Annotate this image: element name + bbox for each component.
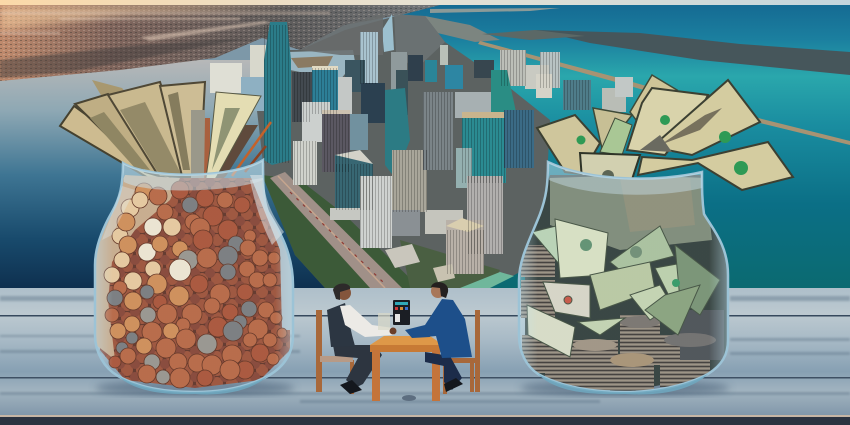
wooden table top bbox=[0, 288, 850, 425]
far left land bbox=[0, 5, 440, 81]
left bills fan bbox=[60, 80, 271, 198]
right jar contents: coin stacks and bills bbox=[521, 175, 728, 392]
tall teal tower bbox=[264, 22, 291, 165]
right businessman bbox=[405, 282, 472, 392]
left jar contents: coins bbox=[90, 175, 293, 388]
left bay water bbox=[0, 60, 400, 290]
jar shadows bbox=[95, 380, 730, 396]
left jar glass bbox=[95, 160, 293, 394]
right bills fan bbox=[537, 75, 793, 210]
left chair bbox=[316, 310, 354, 394]
sky band bbox=[0, 0, 850, 6]
right chair bbox=[442, 310, 480, 394]
skyline grid bbox=[300, 14, 445, 70]
right ocean water bbox=[400, 5, 850, 290]
green strips beside the road bbox=[262, 175, 420, 288]
land grain and haze bbox=[0, 5, 440, 83]
tablet on desk bbox=[393, 300, 410, 325]
buildings front row bbox=[293, 88, 534, 288]
buildings back row bbox=[210, 32, 633, 123]
inner waterway and river bbox=[288, 14, 394, 80]
green land at lower city bbox=[400, 240, 500, 288]
city land mass bbox=[250, 15, 550, 288]
glass on desk bbox=[378, 313, 390, 330]
far right islands bbox=[425, 8, 850, 75]
jetty bbox=[478, 41, 850, 145]
right jar glass bbox=[519, 162, 728, 394]
highway bbox=[270, 172, 402, 288]
dropped coin bbox=[402, 395, 416, 401]
window stripes bbox=[264, 25, 591, 274]
desk bbox=[370, 336, 443, 401]
left businessman bbox=[327, 284, 396, 394]
